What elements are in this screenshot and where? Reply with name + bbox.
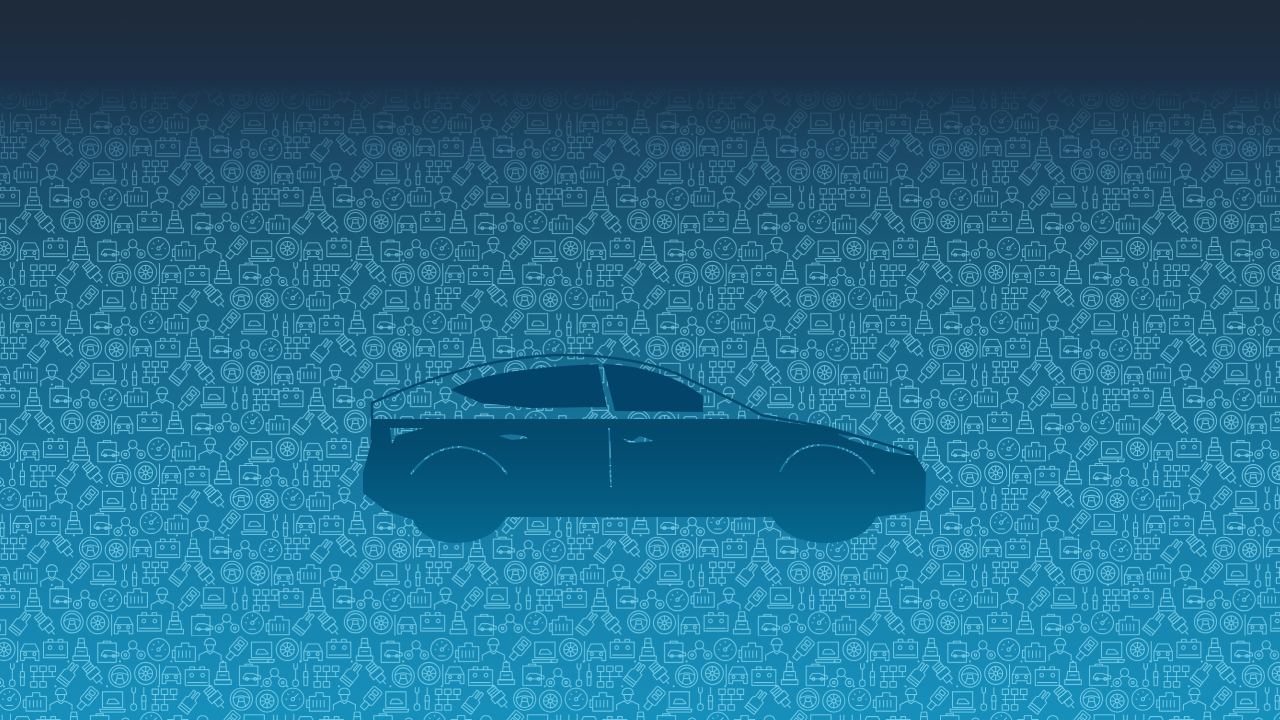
- car body: [363, 419, 926, 543]
- car silhouette: [363, 355, 926, 543]
- car side windows: [451, 364, 703, 412]
- car roofline: [372, 355, 914, 453]
